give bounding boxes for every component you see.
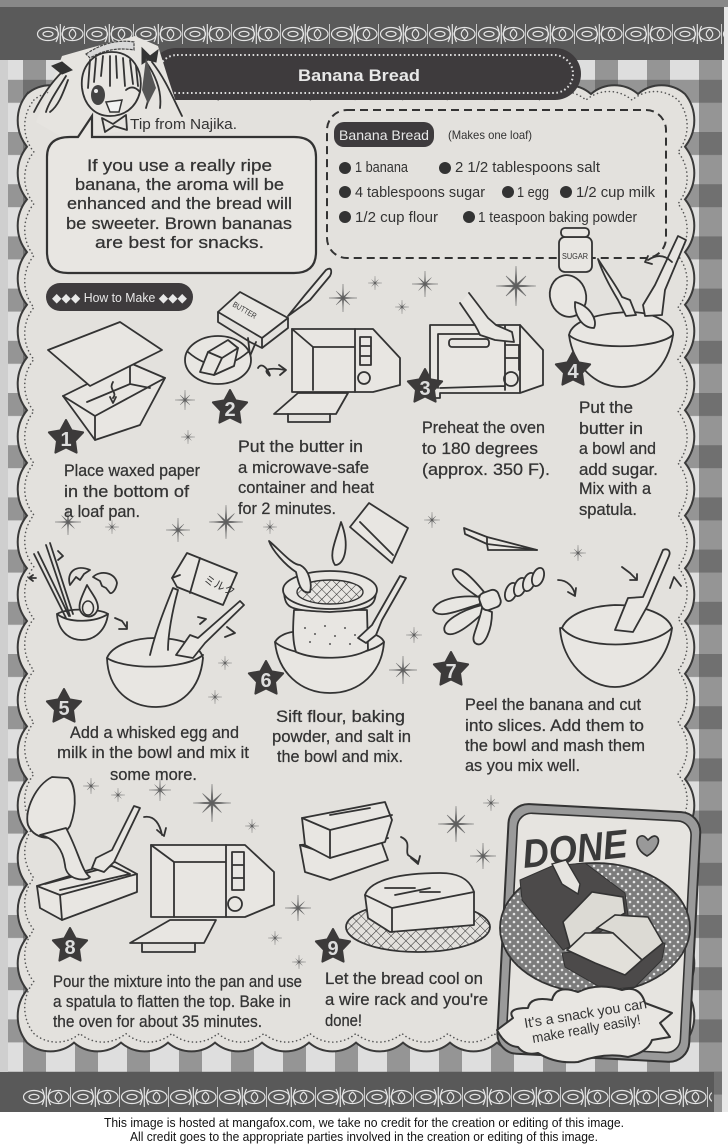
step 1 — [48, 322, 200, 521]
step 4: spatula. — [579, 501, 637, 519]
step 3 — [408, 293, 550, 479]
how to make label — [46, 283, 193, 311]
step 9: a wire rack and you're — [325, 991, 488, 1009]
step 2: Put the butter in — [238, 438, 363, 456]
step 5: ミルク — [202, 573, 237, 599]
step 9: done! — [325, 1012, 362, 1030]
step 8: Pour the mixture into the pan and use — [53, 973, 302, 991]
recipe ingredient box: 1 banana — [355, 160, 409, 176]
step 7: the bowl and mash them — [465, 737, 645, 755]
step 6: Sift flour, baking — [276, 708, 405, 726]
step 5: some more. — [110, 766, 197, 784]
recipe ingredient box: 1/2 cup flour — [355, 210, 438, 226]
tip speech box: enhanced and the bread will — [67, 195, 292, 213]
step 5: 5 — [58, 698, 70, 720]
step 2: BUTTER — [231, 300, 258, 321]
hosting credit footer — [104, 1115, 624, 1144]
step 8 — [27, 777, 302, 1031]
tip speech box: banana, the aroma will be — [75, 176, 284, 194]
recipe ingredient box: 1/2 cup milk — [576, 185, 656, 201]
step 4 — [545, 228, 686, 519]
callout burst: make really easily! — [531, 1011, 642, 1046]
hosting credit footer: All credit goes to the appropriate parties involved in the creation or editing of this image. — [130, 1129, 598, 1144]
callout burst: It's a snack you can — [523, 995, 648, 1031]
step 9: Let the bread cool on — [325, 970, 483, 988]
step 6 — [249, 503, 411, 766]
step 2: container and heat — [238, 479, 374, 497]
tip speech box: are best for snacks. — [95, 234, 264, 252]
step 1: a loaf pan. — [64, 503, 140, 521]
top band with lace — [0, 0, 728, 60]
step 2: 2 — [224, 399, 236, 421]
step 8: a spatula to flatten the top. Bake in — [53, 993, 291, 1011]
recipe ingredient box: 1 teaspoon baking powder — [478, 210, 637, 226]
recipe ingredient box: Banana Bread — [339, 127, 429, 143]
recipe ingredient box: 4 tablespoons sugar — [355, 185, 485, 201]
tip speech box — [47, 116, 316, 273]
step 9: 9 — [327, 938, 339, 960]
recipe ingredient box: (Makes one loaf) — [448, 128, 532, 142]
hosting credit footer: This image is hosted at mangafox.com, we take no credit for the creation or editing of this image. — [104, 1115, 624, 1130]
sliced banana bread — [520, 860, 665, 990]
step 4: butter in — [579, 420, 643, 438]
done heading: DONE — [520, 822, 631, 877]
step 4: a bowl and — [579, 440, 656, 458]
heart icon — [637, 836, 658, 856]
step 7: Peel the banana and cut — [465, 696, 641, 714]
step 4: SUGAR — [562, 252, 588, 261]
character: Najika — [34, 36, 190, 136]
step 7: as you mix well. — [465, 757, 580, 775]
step 8: the oven for about 35 minutes. — [53, 1013, 262, 1031]
step 4: 4 — [567, 361, 579, 383]
step 1: Place waxed paper — [64, 462, 200, 480]
step 4: Mix with a — [579, 480, 652, 498]
step 6: the bowl and mix. — [277, 748, 403, 766]
step 7: into slices. Add them to — [465, 717, 644, 735]
step 4: add sugar. — [579, 461, 658, 479]
step 6: 6 — [260, 670, 272, 692]
step 3: Preheat the oven — [422, 419, 545, 437]
recipe ingredient box: 1 egg — [517, 185, 549, 201]
step 2: a microwave-safe — [238, 459, 369, 477]
recipe ingredient box — [327, 110, 666, 258]
step 7 — [433, 528, 681, 775]
step 7: 7 — [445, 661, 457, 683]
step 1: 1 — [60, 429, 72, 451]
step 5: Add a whisked egg and — [70, 724, 239, 742]
tip speech box: be sweeter. Brown bananas — [66, 215, 292, 233]
step 8: 8 — [64, 937, 76, 959]
tip speech box: If you use a really ripe — [87, 157, 272, 175]
step 9 — [300, 802, 490, 1030]
step 2 — [185, 269, 400, 518]
step 4: Put the — [579, 399, 633, 417]
step 5 — [29, 543, 249, 784]
decorative sparkles — [55, 266, 681, 998]
title banner: Banana Bread — [298, 66, 420, 85]
bottom band with lace — [0, 1072, 714, 1112]
step 2: for 2 minutes. — [238, 500, 336, 518]
how to make label: ◆◆◆ How to Make ◆◆◆ — [52, 291, 187, 305]
tip label: Tip from Najika. — [130, 117, 237, 133]
recipe ingredient box: 2 1/2 tablespoons salt — [455, 160, 600, 176]
step 3: (approx. 350 F). — [422, 461, 550, 479]
title banner — [150, 48, 581, 100]
scalloped main panel — [18, 85, 694, 1051]
callout burst — [497, 986, 672, 1062]
step 3: 3 — [419, 378, 431, 400]
step 5: milk in the bowl and mix it — [57, 744, 249, 762]
step 1: in the bottom of — [64, 483, 189, 501]
step 3: to 180 degrees — [422, 440, 538, 458]
step 6: powder, and salt in — [272, 728, 411, 746]
done card — [496, 803, 701, 1063]
